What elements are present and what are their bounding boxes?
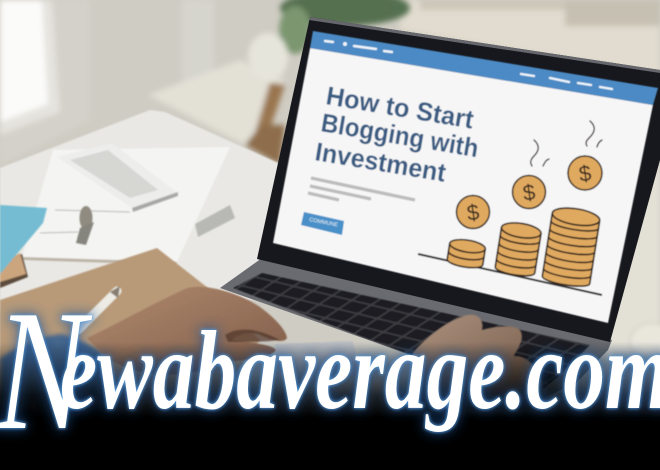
- laptop lid: [257, 17, 660, 342]
- browser header bar: [310, 31, 658, 105]
- desk right of laptop: [600, 150, 660, 400]
- dollar coin 2: $: [521, 179, 537, 206]
- screen heading: [313, 80, 481, 188]
- desk: [0, 110, 290, 310]
- binder clip: [76, 206, 94, 245]
- placeholder text lines: [308, 178, 415, 200]
- dollar coin 1: [456, 196, 490, 228]
- call-to-action button: [301, 212, 344, 235]
- left hand: [87, 287, 287, 374]
- coin stack 2: [494, 220, 542, 278]
- coin stack 3: [542, 205, 601, 289]
- screen heading: How to Start: [324, 80, 476, 135]
- black footer band: [0, 417, 660, 470]
- chart baseline: [418, 254, 602, 295]
- laptop screen: [273, 31, 658, 323]
- screen heading: Investment: [313, 136, 448, 188]
- dollar coin 3: [568, 156, 602, 190]
- sleeve: [0, 334, 115, 420]
- dollar coin 1: $: [465, 199, 481, 226]
- coin stack 1: [446, 237, 486, 270]
- pen: [78, 286, 120, 330]
- notebooks: [0, 205, 47, 288]
- screen heading: Blogging with: [319, 107, 481, 163]
- right hand: [413, 315, 545, 410]
- dark gradient overlay: [0, 342, 660, 418]
- plant: [248, 0, 410, 81]
- papers on desk: [22, 143, 230, 265]
- call-to-action button: COMMUNE: [309, 217, 339, 229]
- rising steam squiggles: [531, 121, 602, 166]
- dollar coin 3: $: [577, 160, 593, 187]
- laptop base with keyboard: [220, 258, 612, 400]
- dollar coin 2: [512, 176, 546, 208]
- silver tube: [195, 205, 235, 237]
- card held in hand: [275, 341, 360, 385]
- kraft folder: [0, 248, 260, 420]
- finger shadow: [225, 330, 280, 342]
